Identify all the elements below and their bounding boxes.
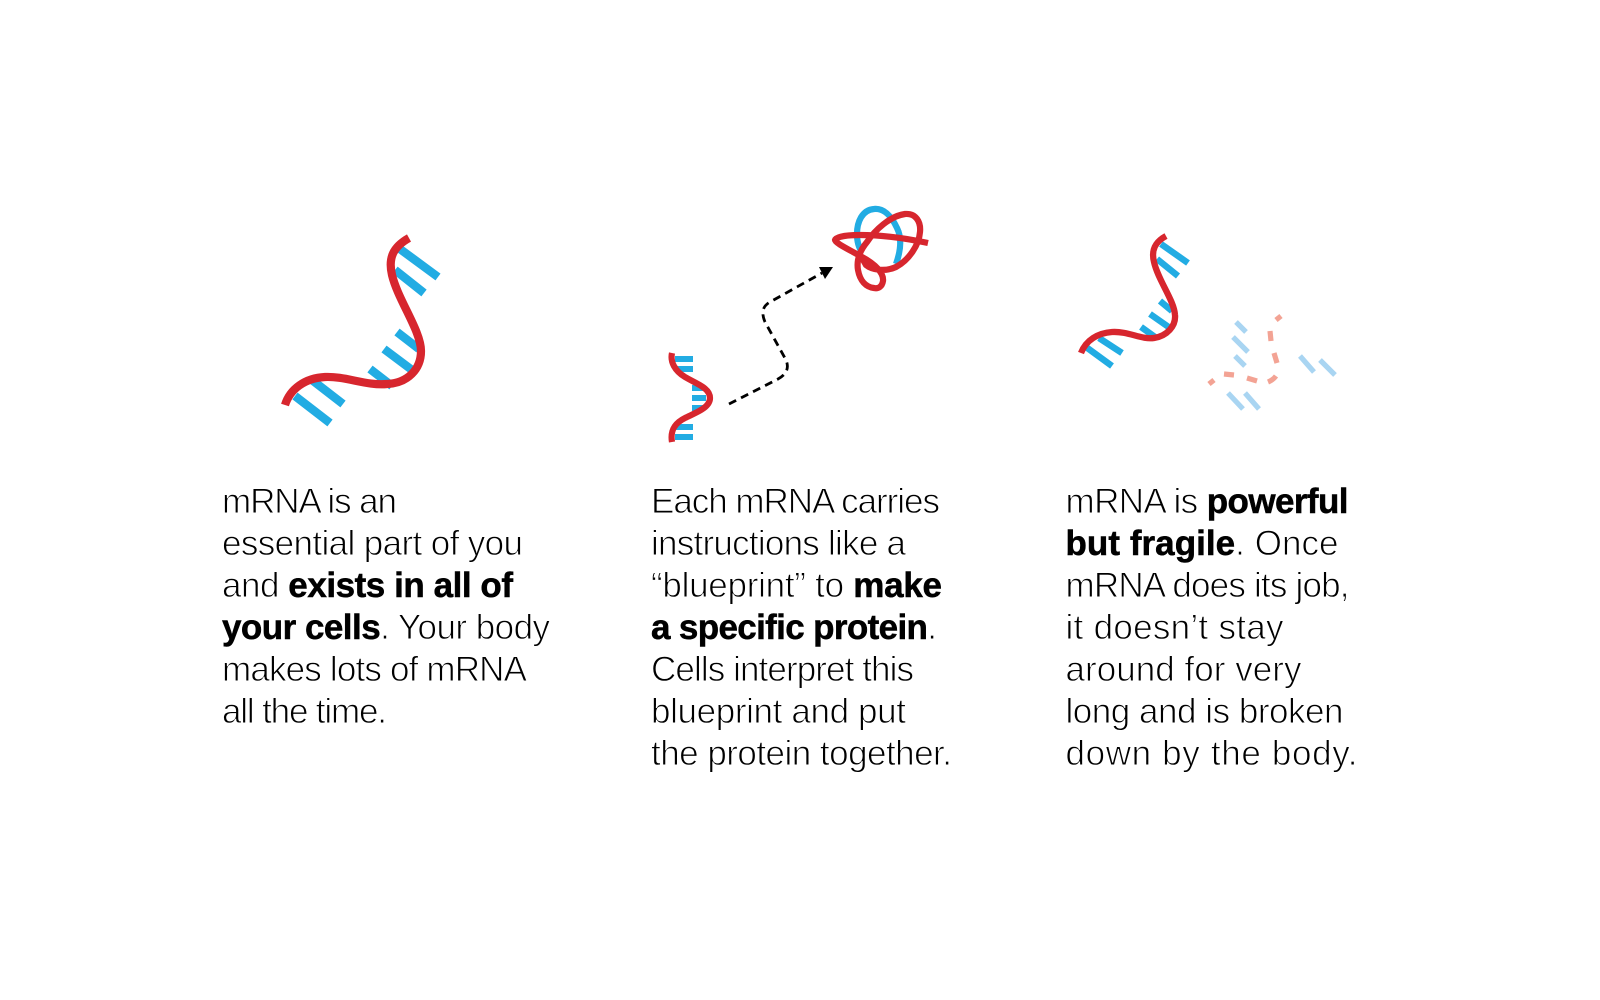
text: second column description: the protein together. (651, 734, 952, 773)
text: first column description: and exists in all of (222, 566, 513, 605)
text: third column description: long and is broken (1066, 692, 1344, 731)
icon: folded protein knot (835, 209, 928, 288)
text: first column description: makes lots of mRNA (222, 650, 528, 689)
text: second column description: Cells interpret this (651, 650, 914, 689)
panel: mRNA is powerful but fragile (1066, 236, 1358, 773)
icon: intact mRNA strand (1081, 236, 1188, 366)
text: second column description: “blueprint” to make (651, 566, 942, 605)
text: second column description: instructions like a (651, 524, 907, 563)
icon: mRNA strand (285, 238, 438, 423)
arrow: dashed path from mRNA to protein (729, 267, 833, 404)
icon: broken-down mRNA fragments (1209, 316, 1335, 409)
text: second column description: blueprint and put (651, 692, 906, 731)
text: first column description (222, 482, 550, 731)
panel: mRNA exists in all cells (222, 238, 550, 731)
text: first column description: all the time. (222, 692, 387, 731)
text: first column description: mRNA is an (222, 482, 397, 521)
text: second column description: a specific protein. (651, 608, 937, 647)
panel: mRNA carries protein blueprint (651, 209, 952, 773)
text: third column description: but fragile. Once (1066, 524, 1338, 563)
text: second column description: Each mRNA carries (651, 482, 940, 521)
text: third column description: around for very (1066, 650, 1302, 689)
text: first column description: your cells. Your body (222, 608, 550, 647)
text: third column description: down by the body. (1066, 734, 1358, 773)
text: third column description: it doesn’t stay (1066, 608, 1284, 647)
text: second column description (651, 482, 952, 773)
text: third column description: mRNA is powerful (1066, 482, 1348, 521)
text: third column description (1066, 482, 1358, 773)
text: first column description: essential part of you (222, 524, 523, 563)
text: third column description: mRNA does its job, (1066, 566, 1350, 605)
icon: short mRNA strand (672, 353, 710, 442)
